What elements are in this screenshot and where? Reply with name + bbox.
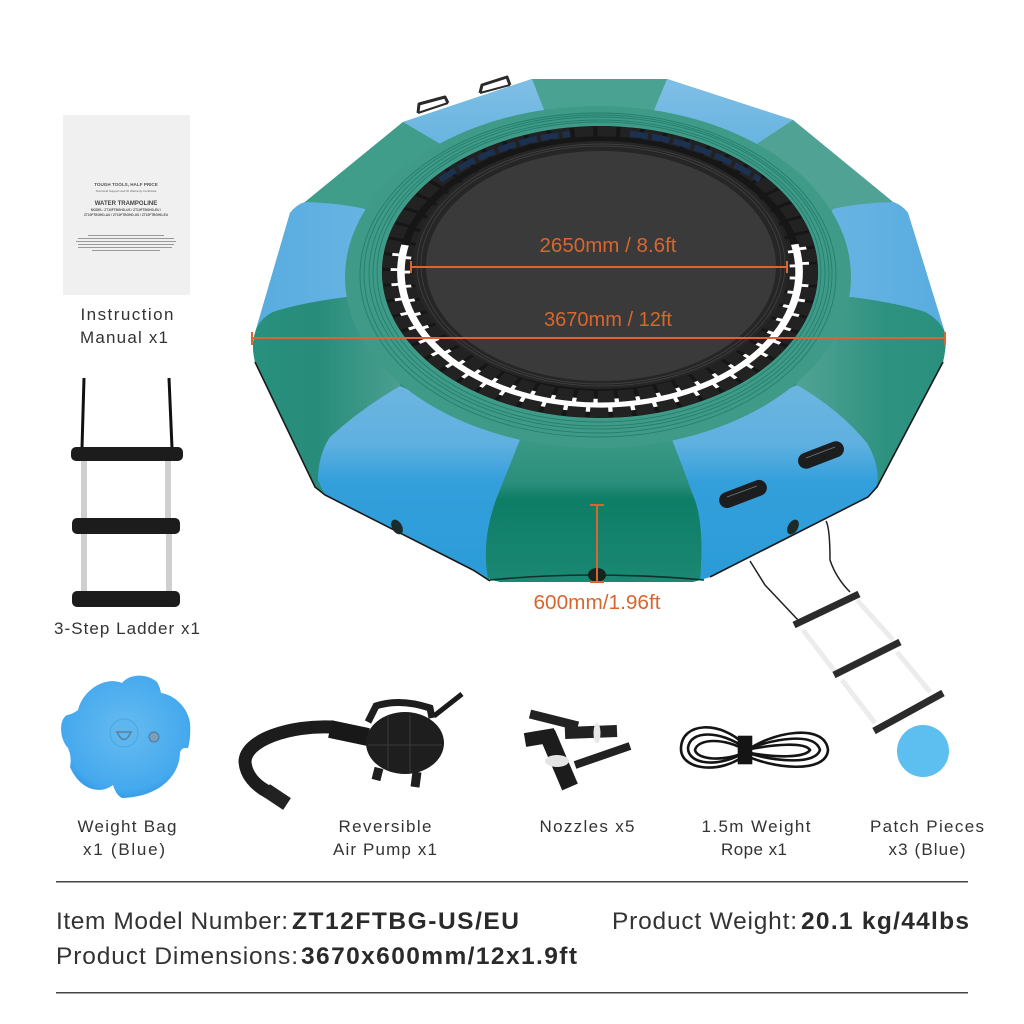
panel: left green xyxy=(253,297,410,487)
label: nozzles: Nozzles x5 xyxy=(540,817,634,836)
outline: lower edge xyxy=(255,362,943,581)
manual: Technical Support and ID Warranty Certificate xyxy=(96,189,157,193)
specs: Item Model Number: xyxy=(56,908,288,935)
label: weight bag xyxy=(78,817,176,859)
manual xyxy=(63,115,190,295)
valve bump xyxy=(588,568,606,582)
patch xyxy=(897,725,949,777)
padded ring xyxy=(345,106,851,448)
specs: 3670x600mm/12x1.9ft xyxy=(301,943,577,970)
spring frame xyxy=(382,126,818,418)
label: patch: Patch Pieces xyxy=(870,817,984,836)
rungs xyxy=(71,447,183,607)
manual: ZT10FTBGHD-AU / ZT10FTBGHD-US / ZT10FTBGHD-EU xyxy=(84,213,169,217)
poles xyxy=(81,460,172,591)
manual: TOUGH TOOLS, HALF PRICE xyxy=(94,182,158,187)
outer body silhouette xyxy=(253,79,946,582)
side handles xyxy=(717,439,846,510)
ladder poles xyxy=(803,600,930,723)
air pump xyxy=(245,694,462,804)
label: rope xyxy=(702,817,811,859)
label: ladder: 3-Step Ladder x1 xyxy=(54,619,200,638)
handle xyxy=(368,702,432,722)
panel: left blue xyxy=(255,202,400,333)
ladder xyxy=(71,378,183,607)
panel: right blue xyxy=(800,202,945,333)
label: patch: x3 (Blue) xyxy=(888,840,966,859)
rope xyxy=(681,727,828,768)
panel: bottom green xyxy=(486,440,701,582)
dimension: overall diameter xyxy=(252,309,945,345)
top handles xyxy=(418,77,510,113)
panel: right green xyxy=(790,297,946,487)
spring tiles inner xyxy=(413,147,787,397)
panel: top left blue xyxy=(403,79,548,150)
dimension: height: 600mm/1.96ft xyxy=(534,592,661,614)
panel: upper left green xyxy=(305,122,442,215)
ladder ropes xyxy=(750,521,850,620)
bottom anchors xyxy=(389,518,801,536)
jumping mat xyxy=(426,151,776,381)
attached ladder xyxy=(750,521,943,731)
cord xyxy=(434,694,462,716)
panel: upper right green xyxy=(755,120,893,215)
label: weight bag: x1 (Blue) xyxy=(83,840,165,859)
ladder rungs xyxy=(794,594,943,731)
panel: bottom left blue xyxy=(318,386,520,578)
hose xyxy=(245,727,332,792)
label: rope: Rope x1 xyxy=(721,840,787,859)
nozzles xyxy=(525,714,630,787)
jumping mat edge xyxy=(413,141,789,389)
specs xyxy=(56,881,969,994)
dimension: height xyxy=(534,505,661,614)
specs: 20.1 kg/44lbs xyxy=(801,908,969,935)
specs: Product Dimensions: xyxy=(56,943,298,970)
body xyxy=(366,712,444,774)
panel: top right blue xyxy=(650,79,793,150)
seam bottom line xyxy=(490,575,704,580)
label: air pump xyxy=(333,817,437,859)
white spring band xyxy=(363,114,837,430)
dimension: overall diameter: 3670mm / 12ft xyxy=(544,309,672,331)
spring tiles outer xyxy=(390,131,810,413)
ring seams xyxy=(360,113,836,437)
weight bag xyxy=(61,676,190,798)
panel: bottom right blue xyxy=(672,385,878,580)
manual: MODEL: ZT10FTBGHD-US / ZT10FTBGHD-EU / xyxy=(91,208,161,212)
label: manual: Manual x1 xyxy=(80,328,168,347)
label: weight bag: Weight Bag xyxy=(78,817,176,836)
label: air pump: Reversible xyxy=(338,817,432,836)
label: rope: 1.5m Weight xyxy=(702,817,811,836)
blue sheen upper springs xyxy=(440,134,760,180)
manual: WATER TRAMPOLINE xyxy=(95,201,157,207)
panel: top green xyxy=(532,79,667,120)
specs: ZT12FTBG-US/EU xyxy=(292,908,519,935)
dimension: mat diameter xyxy=(411,235,787,273)
connector xyxy=(330,729,368,737)
grip lines xyxy=(368,715,442,773)
dimension: mat diameter: 2650mm / 8.6ft xyxy=(540,235,677,257)
ropes xyxy=(82,378,172,448)
label: manual xyxy=(80,305,174,347)
feet xyxy=(376,768,417,787)
nozzle end xyxy=(266,790,287,804)
mat stitching xyxy=(417,144,785,386)
label: manual: Instruction xyxy=(80,305,174,324)
label: air pump: Air Pump x1 xyxy=(333,840,437,859)
trampoline xyxy=(253,77,946,582)
specs: Product Weight: xyxy=(612,908,797,935)
label: patch xyxy=(870,817,984,859)
